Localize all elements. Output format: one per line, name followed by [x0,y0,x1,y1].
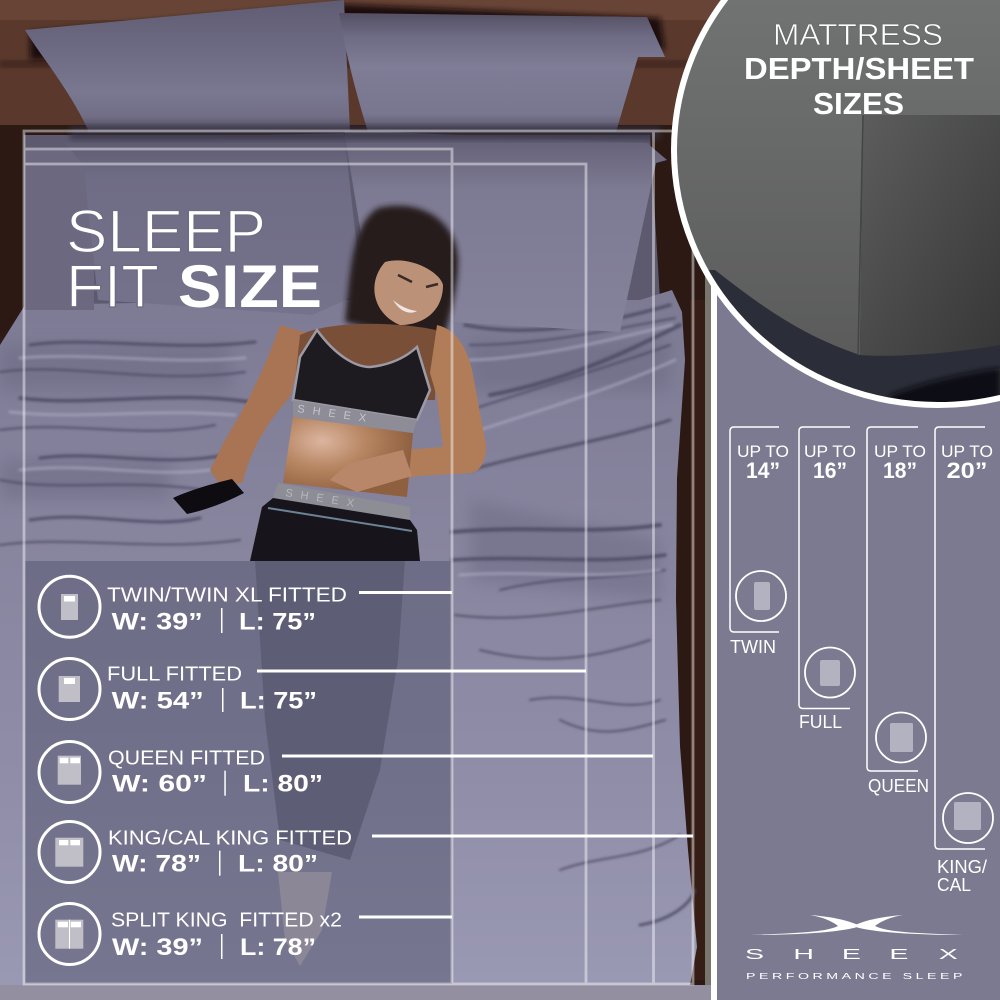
heading: mattress depth/sheet sizes: SIZES [813,86,904,121]
mattress upper area and left side [660,0,1000,355]
shadow cast by top pillows on the headboard [30,4,665,60]
king leader line [372,834,693,838]
depth column: queen [867,427,929,796]
pants stripe [268,508,412,531]
icon: split king bed [39,904,100,964]
split king dimensions: L: 78” [240,934,316,961]
full caption: FULL [799,712,842,732]
circle white ring [674,0,1000,405]
waistband with logo: SHEEX [285,487,363,511]
full dimensions [112,687,317,714]
foot [278,872,332,966]
full label: FULL FITTED [107,664,242,686]
size row: full [39,658,586,720]
twin label: TWIN/TWIN XL FITTED [107,585,347,607]
duvet highlights [10,325,675,575]
logo wordmark: SHEEX [745,945,958,962]
waistband with logo [273,483,410,520]
sheet behind the pillows [24,135,660,320]
eyes [398,275,438,287]
mattress side right of crease [860,115,1000,356]
crease [858,115,863,355]
queen caption: QUEEN [868,776,929,796]
queen label: QUEEN FITTED [108,747,265,769]
twin depth text: 14” [746,458,780,483]
king dimensions: W: 78” [112,851,201,878]
icon: queen bed [39,742,100,802]
king caption [937,857,987,895]
king dimensions: L: 80” [238,851,318,878]
icon: full mattress [805,648,855,698]
king caption: KING/ [937,857,987,877]
twin depth text: UP TO [737,442,789,461]
logo tagline: PERFORMANCE SLEEP [746,972,966,981]
logo: sheex performance sleep [745,915,966,981]
full dimensions: W: 54” [112,687,204,714]
logo swoosh [750,915,963,935]
fold shading on the duvet [0,340,670,600]
frame: king [24,131,693,984]
heading: mattress depth/sheet sizes: MATTRESS [773,17,943,52]
twin dimensions: W: 39” [112,608,203,635]
heading: mattress depth/sheet sizes: DEPTH/SHEET [744,51,974,86]
king depth text [941,442,993,483]
queen depth text [874,442,926,483]
split king leader line [359,916,452,918]
queen dimensions [112,771,323,798]
split king dimensions [112,934,316,961]
dark fabric shadow [888,366,1000,402]
dark duvet wrinkles [0,305,695,925]
icon: twin mattress [736,571,786,621]
woman left arm [210,325,307,488]
pillows: top row [25,0,665,132]
full leader line [257,670,586,672]
title: sleep fit size: FIT [66,253,159,320]
king depth text: UP TO [941,442,993,461]
woman right arm [330,325,486,492]
title: sleep fit size: SLEEP [66,198,266,265]
icon: full bed [39,658,100,720]
dark panel behind size list [25,561,452,984]
king dimensions [112,851,318,878]
full depth bracket [799,427,850,708]
full dimensions: L: 75” [240,687,317,714]
sports bra [293,330,430,420]
full depth text: UP TO [804,442,856,461]
twin dimensions: L: 75” [239,608,316,635]
queen depth text: UP TO [874,442,926,461]
queen depth bracket [867,427,918,771]
circle: mattress corner photo [660,0,1000,410]
depth column: king / cal [935,427,993,895]
king depth text: 20” [946,458,988,483]
bra band with logo [293,400,417,433]
size row: queen [39,742,653,802]
size outline frames [24,131,693,984]
twin leader line [359,591,452,594]
size row: twin / twin XL [39,576,452,637]
king label: KING/CAL KING FITTED [108,827,352,849]
box spring [708,250,1000,398]
depth column: twin [730,427,789,657]
frame: twin [24,149,452,984]
icon: king mattress [943,793,993,843]
queen leader line [282,754,653,758]
size row: split king [39,904,452,964]
queen dimensions: W: 60” [112,771,207,798]
frame: full [24,164,586,984]
smile [393,300,417,313]
bra band with logo: SHEEX [297,403,375,426]
full depth text [804,442,856,483]
phone [173,479,244,514]
pillows: second row [24,126,667,332]
woman chest [293,324,436,400]
woman face [374,260,443,325]
leg of the woman dimmed by the panel [255,560,405,860]
size row: king / cal king [39,822,693,882]
twin caption: TWIN [730,637,776,657]
frame: queen [652,131,655,984]
queen dimensions: L: 80” [243,771,323,798]
king depth bracket [935,427,985,849]
title: sleep fit size: SIZE [178,253,322,320]
duvet [0,290,697,985]
queen depth text: 18” [883,458,917,483]
full depth text: 16” [813,458,847,483]
woman stomach [283,417,413,497]
icon: queen mattress [876,712,926,762]
title: sleep fit size [66,198,322,320]
heading: mattress depth/sheet sizes [744,17,974,121]
icon: king bed [39,822,100,882]
pants [250,498,420,561]
split king label: SPLIT KING FITTED x2 [111,910,342,932]
split king dimensions: W: 39” [112,934,203,961]
twin dimensions [112,608,316,635]
hand on stomach [330,450,412,492]
twin depth bracket [730,427,779,632]
twin depth text [737,442,789,483]
panel: mattress depth background [711,260,1000,1000]
woman hair [345,206,458,368]
depth column: full [799,427,856,732]
king caption: CAL [937,875,971,895]
icon: twin bed [39,576,100,637]
